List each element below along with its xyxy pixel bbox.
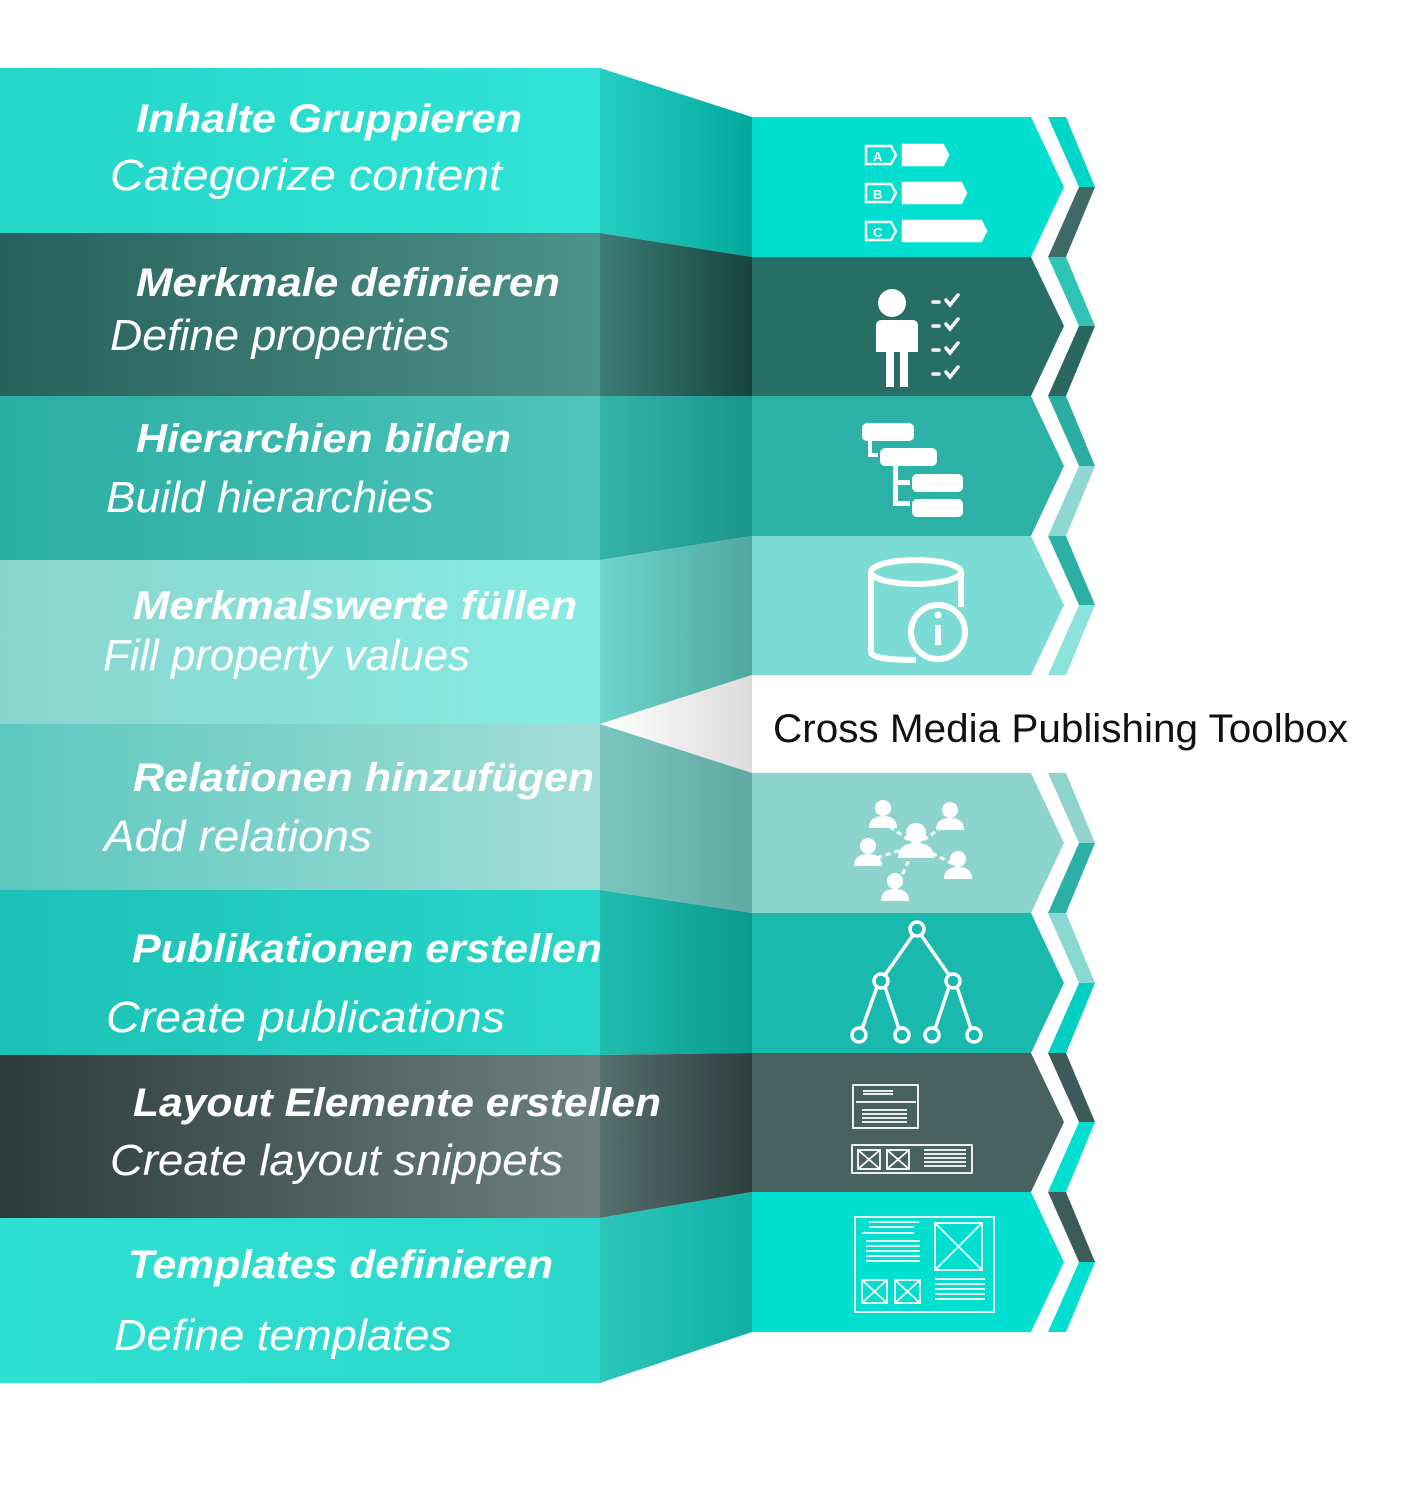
text: step 6: Create publications [106, 993, 505, 1042]
panel: left step 7 [0, 1053, 752, 1218]
right chevron 3 [752, 396, 1095, 536]
right chevron 4 [752, 536, 1095, 675]
icon: network people [854, 800, 972, 901]
icon: ABC categories: B [873, 187, 882, 202]
text: step 7 [110, 1081, 661, 1185]
text: step 2: Merkmale definieren [136, 261, 560, 305]
panel: left step 1 [0, 68, 752, 257]
panel: left step 8 [0, 1192, 752, 1383]
text: step 2 [110, 261, 560, 360]
text: step 1: Inhalte Gruppieren [136, 97, 522, 141]
text: step 6 [106, 927, 602, 1042]
icon: layout snippets [852, 1085, 972, 1173]
text: step 8 [114, 1243, 553, 1360]
right chevron 2 [752, 257, 1095, 396]
text: step 5: Relationen hinzufügen [133, 756, 594, 800]
text: step 7: Create layout snippets [110, 1136, 563, 1185]
text: step 2: Define properties [110, 311, 450, 360]
text: step 8: Define templates [114, 1311, 452, 1360]
connector: toolbox wedge [600, 675, 752, 773]
icon: ABC categories: C [873, 225, 883, 240]
panel: left step 5 [0, 724, 752, 913]
text: step 3 [106, 417, 511, 522]
right chevron 5 [752, 773, 1095, 913]
icon: template [855, 1217, 994, 1312]
text: step 1 [110, 97, 522, 200]
text: step 4: Fill property values [103, 631, 470, 680]
icon: hierarchy tree [862, 423, 963, 517]
panel: left step 2 [0, 233, 752, 396]
heading: toolbox label: Cross Media Publishing Toolbox [773, 707, 1348, 751]
text: step 3: Build hierarchies [106, 473, 434, 522]
right chevron 8 [752, 1192, 1095, 1332]
right chevron 6 [752, 913, 1095, 1053]
text: step 7: Layout Elemente erstellen [133, 1081, 661, 1125]
text: step 4 [103, 584, 577, 680]
text: step 4: Merkmalswerte füllen [133, 584, 577, 628]
icon: database info [871, 560, 965, 660]
icon: person checklist [872, 289, 958, 387]
icon: ABC categories [866, 145, 986, 241]
text: step 8: Templates definieren [128, 1243, 553, 1287]
icon: ABC categories: A [873, 149, 883, 164]
icon: publication tree [852, 922, 981, 1042]
right chevron 1 [752, 117, 1095, 257]
text: step 5: Add relations [101, 812, 372, 861]
text: step 5 [101, 756, 594, 861]
panel: left step 4 [0, 536, 752, 724]
text: step 6: Publikationen erstellen [132, 927, 602, 971]
panel: left step 6 [0, 890, 752, 1055]
text: step 1: Categorize content [110, 151, 504, 200]
right chevron 7 [752, 1053, 1095, 1192]
panel: left step 3 [0, 396, 752, 560]
text: step 3: Hierarchien bilden [136, 417, 511, 461]
